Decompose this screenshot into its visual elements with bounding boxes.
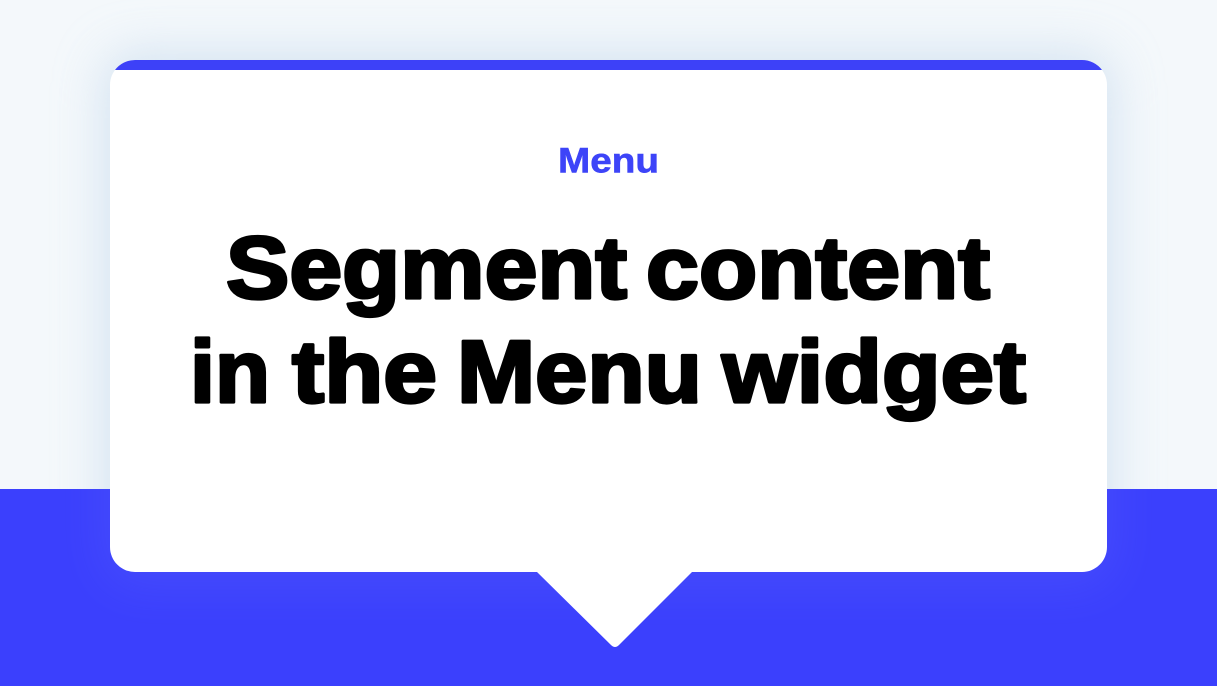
heading line 1: content	[646, 218, 990, 317]
heading line 2: widget	[721, 322, 1026, 421]
heading line 2: Menu	[457, 322, 702, 421]
heading	[190, 218, 1026, 421]
blue bottom band	[0, 489, 1217, 686]
card	[110, 60, 1107, 647]
heading line 2: in	[190, 322, 270, 421]
card top accent	[115, 60, 1102, 70]
heading line 2: the	[292, 322, 437, 421]
heading line 1	[226, 218, 990, 317]
card body with pointer	[110, 60, 1107, 647]
card shadow	[104, 52, 1113, 578]
eyebrow label: Menu	[558, 142, 659, 181]
heading line 1: Segment	[226, 218, 627, 317]
heading line 2	[190, 322, 1026, 421]
